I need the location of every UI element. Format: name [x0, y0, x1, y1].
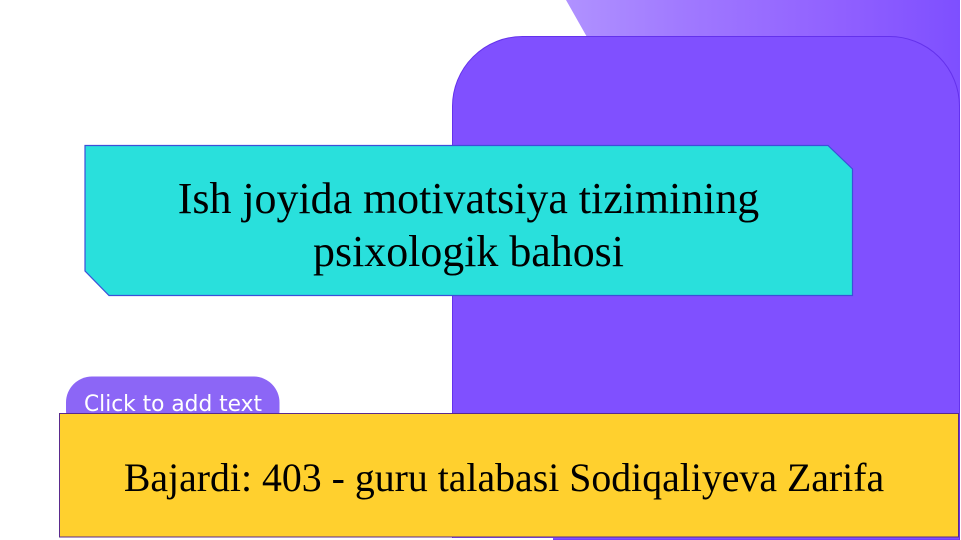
- title panel: turquoise snipped rectangle: [85, 146, 852, 296]
- white cover: below the yellow banner on the left: [0, 538, 553, 540]
- placeholder pill: click to add text: [66, 376, 280, 436]
- panel: purple rounded background: [452, 36, 960, 540]
- author banner: yellow rectangle: [60, 414, 958, 537]
- placeholder text: Click to add text: [84, 392, 262, 417]
- decorative gradient shape: top right: [553, 0, 960, 540]
- title text: psixologik bahosi: [313, 228, 624, 276]
- author text: Bajardi: 403 - guru talabasi Sodiqaliyeva Zarifa: [124, 456, 884, 500]
- title text: Ish joyida motivatsiya tizimining: [178, 175, 759, 223]
